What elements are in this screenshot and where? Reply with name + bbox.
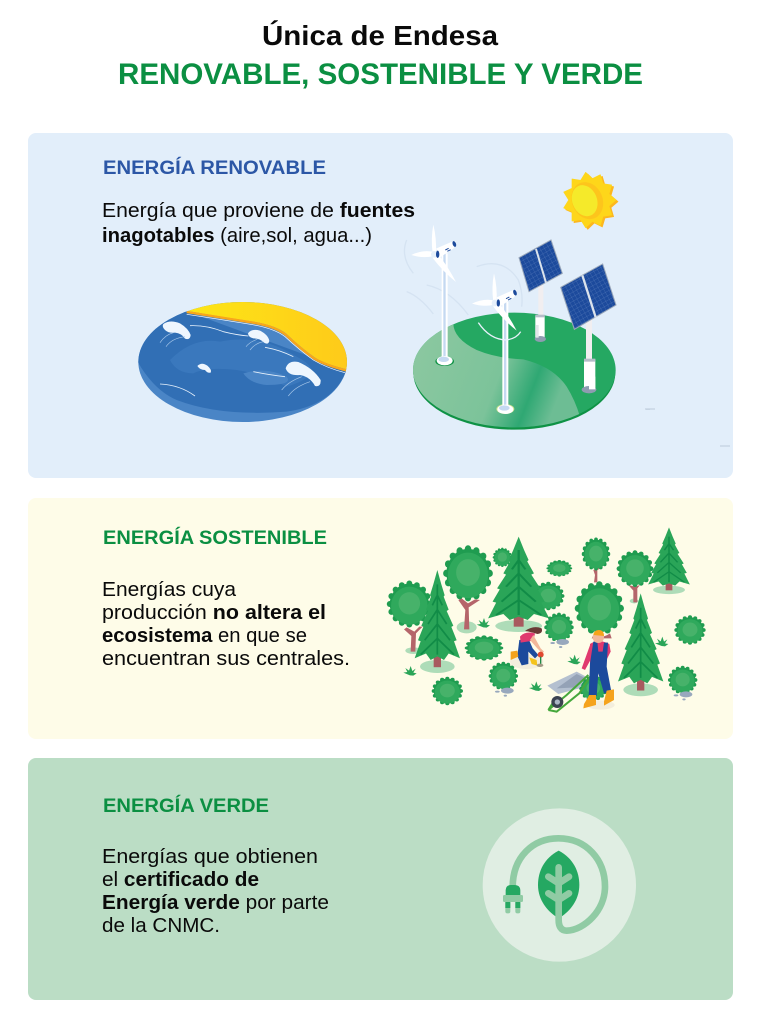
badge circle <box>483 808 636 962</box>
leaf <box>538 851 579 918</box>
description <box>102 846 329 937</box>
description: de la CNMC. <box>102 915 220 937</box>
person: kneeling gardener <box>510 627 544 669</box>
turbine front <box>472 273 518 414</box>
illustration: wind and solar island <box>403 172 650 437</box>
background bushes <box>493 548 572 610</box>
solar panel rear <box>519 240 562 342</box>
wind swirls <box>404 240 522 315</box>
title line 2: RENOVABLE, SOSTENIBLE Y VERDE <box>118 58 643 91</box>
panel background <box>28 133 733 478</box>
grass and rocks <box>403 618 692 700</box>
panel background <box>28 498 733 739</box>
description: inagotables (aire,sol, agua...) <box>102 225 372 247</box>
heading: ENERGÍA VERDE <box>103 795 269 817</box>
round trees <box>387 537 653 654</box>
cable and veins <box>513 838 605 931</box>
description: Energías que obtienen <box>102 846 318 868</box>
wheelbarrow <box>547 672 590 712</box>
panel: energía verde <box>28 758 733 1000</box>
title line 1: Única de Endesa <box>262 20 498 51</box>
panel background <box>28 758 733 1000</box>
tiny marks <box>645 409 730 446</box>
icon: leaf and plug <box>483 808 636 962</box>
description: Energía que proviene de fuentes <box>102 200 415 222</box>
description <box>102 579 350 670</box>
panel: energía sostenible <box>28 498 733 739</box>
solar panel front <box>561 264 616 393</box>
description: producción no altera el <box>102 602 326 624</box>
foam crests <box>163 321 321 386</box>
bushes <box>432 613 706 705</box>
island <box>413 312 616 430</box>
illustration: ocean and beach <box>138 302 347 422</box>
panel: energía renovable <box>28 133 733 478</box>
plug <box>503 885 523 913</box>
person: worker with wheelbarrow <box>582 630 615 710</box>
description: el certificado de <box>102 869 259 891</box>
pines <box>415 527 690 696</box>
description: Energía verde por parte <box>102 892 329 914</box>
description <box>102 200 415 247</box>
heading: ENERGÍA RENOVABLE <box>103 157 326 179</box>
description: encuentran sus centrales. <box>102 648 350 670</box>
description: ecosistema en que se <box>102 625 307 647</box>
illustration: forest with workers <box>387 527 706 712</box>
description: Energías cuya <box>102 579 237 601</box>
turbine left <box>411 225 457 366</box>
title <box>118 20 643 91</box>
icon: sun <box>564 172 618 229</box>
heading: ENERGÍA SOSTENIBLE <box>103 527 327 549</box>
